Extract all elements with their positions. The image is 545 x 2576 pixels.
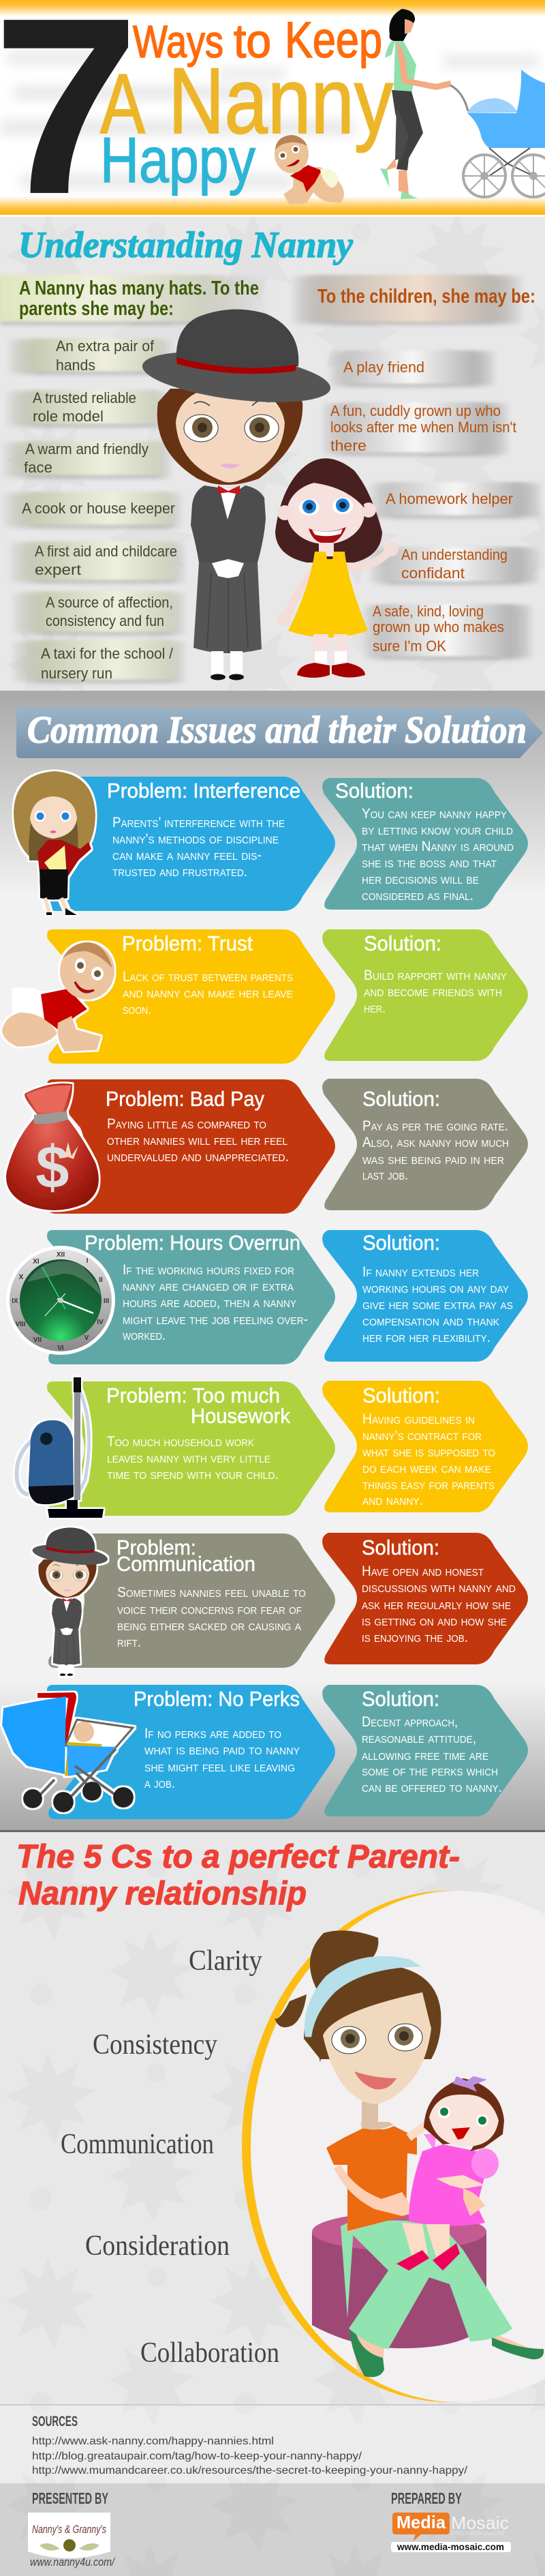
sources: http://www.ask-nanny.com/happy-nannies.html	[32, 2436, 274, 2447]
problem panel: time to spend with your child.	[107, 1467, 279, 1482]
icon: crawling baby	[275, 135, 344, 205]
solution panel: and nanny.	[362, 1493, 423, 1508]
solution panel: Solution:	[362, 1383, 440, 1407]
solution panel: Solution:	[362, 1687, 439, 1711]
row 4: hours overrun	[6, 1230, 528, 1364]
icon: wall clock: II	[99, 1276, 103, 1284]
solution panel	[322, 1079, 528, 1210]
list: parents roles	[0, 338, 187, 682]
problem panel: she might feel like leaving	[144, 1759, 295, 1775]
item: homework: A homework helper	[386, 490, 513, 507]
item: safe: grown up who makes	[373, 618, 504, 635]
item: cuddly	[320, 402, 516, 454]
item: play friend: A play friend	[343, 359, 424, 376]
item: taxi	[10, 640, 187, 682]
problem panel: Problem: Bad Pay	[106, 1087, 264, 1111]
solution panel: working hours on any day	[362, 1280, 509, 1296]
item: warm face	[0, 440, 174, 476]
solution panel: Solution:	[362, 1087, 440, 1111]
solution panel: compensation and thank	[362, 1313, 499, 1329]
title: A Nanny: A	[100, 57, 145, 151]
solution panel	[322, 929, 528, 1061]
item: confidant: An understanding	[401, 546, 508, 563]
solution panel: last job.	[362, 1167, 408, 1183]
solution panel: her for her flexibility.	[362, 1330, 490, 1345]
solution panel: allowing free time are	[362, 1748, 488, 1763]
character: crawling baby	[2, 942, 114, 1051]
footer band	[0, 2483, 545, 2576]
problem panel: can make a nanny feel dis-	[112, 848, 262, 863]
item: affection: consistency and fun	[46, 612, 164, 629]
list: the five Cs: Communication	[61, 2129, 214, 2160]
item: first aid	[7, 541, 187, 580]
solution panel: Decent approach,	[362, 1714, 458, 1730]
problem panel: If the working hours fixed for	[123, 1262, 294, 1278]
illustration: mother and child in circle	[242, 1891, 545, 2402]
row 1: interference	[14, 771, 528, 915]
item: cuddly: there	[330, 437, 367, 454]
item: taxi: nursery run	[41, 665, 112, 682]
solution panel: Solution:	[362, 1536, 439, 1559]
solution panel: she is the boss and that	[362, 855, 497, 871]
sources	[32, 2414, 468, 2476]
list: children roles	[320, 350, 544, 657]
item: extra pair of hands	[5, 338, 172, 374]
problem panel: Parents’ interference with the	[112, 815, 285, 830]
header panel	[0, 0, 545, 247]
row 2: trust	[2, 929, 528, 1064]
solution panel: discussions with nanny and	[362, 1580, 516, 1596]
problem panel: rift.	[117, 1634, 141, 1650]
panel: parents heading	[0, 275, 272, 322]
row 6: communication	[31, 1527, 528, 1676]
character: nanny with hat	[140, 310, 333, 680]
icon: wall clock: III	[104, 1298, 109, 1305]
presented by: www.nanny4u.com/	[30, 2556, 116, 2568]
icon: wall clock: VII	[33, 1336, 42, 1344]
problem panel	[47, 777, 335, 911]
sources: SOURCES	[32, 2414, 78, 2429]
title: A Nanny: Nanny	[168, 49, 393, 153]
solution panel: Solution:	[364, 931, 441, 955]
solution panel: and become friends with	[364, 984, 502, 1000]
icon: wall clock: X	[19, 1274, 24, 1281]
item: role model	[3, 389, 170, 425]
item: extra pair of hands: hands	[56, 357, 95, 374]
section background: understanding nanny	[0, 217, 545, 691]
solution panel: considered as final.	[362, 888, 473, 903]
solution panel	[322, 1381, 528, 1512]
problem panel: Problem: Trust	[122, 931, 253, 955]
problem panel: a job.	[144, 1776, 175, 1791]
icon: wall clock: XII	[57, 1251, 65, 1259]
solution panel	[322, 1533, 528, 1664]
item: role model: role model	[33, 408, 104, 425]
list: the five Cs: Collaboration	[140, 2337, 279, 2369]
item: confidant	[368, 546, 542, 582]
solution panel: Having guidelines in	[362, 1411, 475, 1427]
logo: Media Mosaic: Media	[396, 2512, 446, 2532]
problem panel: Lack of trust between parents	[123, 969, 293, 985]
prepared by: PREPARED BY	[391, 2489, 462, 2507]
solution panel: If nanny extends her	[362, 1264, 479, 1280]
item: homework	[368, 482, 544, 515]
list: the five Cs: Consideration	[85, 2230, 230, 2262]
sources: http://blog.greataupair.com/tag/how-to-keep-your-nanny-happy/	[32, 2451, 362, 2462]
solution panel: can be offered to nanny.	[362, 1780, 502, 1795]
problem panel: Housework	[191, 1404, 290, 1428]
solution panel: is enjoying the job.	[362, 1630, 468, 1645]
icon: woman pushing stroller	[380, 9, 545, 199]
icon: wall clock: VI	[57, 1345, 64, 1352]
title: Ways to Keep	[133, 12, 382, 68]
item: affection: A source of affection,	[46, 594, 173, 611]
icon: baby in stroller	[2, 1692, 134, 1812]
icon: vacuum cleaner	[16, 1377, 104, 1518]
problem panel: hours are added, then a nanny	[123, 1295, 296, 1311]
solution panel: Pay as per the going rate.	[362, 1118, 508, 1134]
item: safe: A safe, kind, loving	[373, 603, 484, 620]
solution panel: Solution:	[335, 779, 414, 803]
solution panel: do each week can make	[362, 1461, 491, 1476]
prepared by	[391, 2489, 511, 2552]
section background: five Cs	[0, 1830, 545, 2576]
icon: wall clock: V	[84, 1334, 89, 1342]
list: the five Cs: Clarity	[189, 1945, 262, 1977]
title: Ways to Keep: Ways	[133, 16, 223, 68]
character: woman with clipboard	[14, 771, 95, 915]
list: the five Cs	[61, 1945, 279, 2369]
solution panel	[322, 778, 528, 910]
icon: wall clock: I	[87, 1257, 89, 1265]
problem panel: Problem: Interference	[107, 779, 300, 803]
solution panel: that when Nanny is around	[362, 839, 514, 854]
title: Ways to Keep: Keep	[285, 12, 382, 68]
icon: money bag: $	[36, 1133, 69, 1201]
solution panel: Build rapport with nanny	[364, 968, 507, 983]
item: safe	[361, 603, 535, 657]
item: confidant: confidant	[401, 565, 465, 582]
solution panel: her decisions will be	[362, 871, 479, 887]
item: taxi: A taxi for the school /	[41, 645, 174, 662]
logo: Media Mosaic: Differentiate yourself	[451, 2530, 505, 2536]
solution panel: what she is supposed to	[362, 1444, 495, 1460]
item: cuddly: A fun, cuddly grown up who	[330, 402, 501, 419]
logo: Nanny's and Granny's: Nanny's & Granny's	[32, 2523, 106, 2536]
item: first aid: A first aid and childcare	[35, 543, 177, 560]
heading: The 5 Cs	[16, 1839, 460, 1912]
problem panel: voice their concerns for fear of	[117, 1602, 302, 1617]
logo: Media Mosaic: www.media-mosaic.com	[396, 2541, 504, 2552]
problem panel	[47, 1381, 335, 1516]
problem panel: and nanny can make her leave	[123, 985, 293, 1001]
problem panel: leaves nanny with very little	[107, 1450, 270, 1466]
item: warm face: A warm and friendly	[25, 440, 149, 458]
solution panel	[322, 1685, 528, 1816]
icon: wall clock: IX	[12, 1298, 18, 1305]
problem panel: Problem: Too much	[106, 1383, 280, 1407]
problem panel: Paying little as compared to	[107, 1116, 266, 1132]
problem panel: Sometimes nannies feel unable to	[117, 1585, 306, 1600]
problem panel: other nannies will feel her feel	[107, 1133, 287, 1148]
item: cook	[0, 492, 184, 525]
problem panel: If no perks are added to	[144, 1726, 281, 1741]
problem panel: being either sacked or causing a	[117, 1618, 301, 1634]
problem panel: Too much household work	[107, 1434, 254, 1450]
section background: common issues	[0, 691, 545, 1831]
heading: Understanding Nanny: Understanding Nanny	[18, 224, 354, 265]
problem panel: nanny are changed or if extra	[123, 1278, 294, 1294]
divider	[0, 2404, 545, 2483]
solution panel	[322, 1230, 528, 1362]
icon: wall clock: XI	[33, 1258, 40, 1265]
icon: wall clock	[6, 1246, 115, 1355]
problem panel	[47, 1533, 335, 1668]
solution panel: by letting know your child	[362, 822, 513, 838]
presented by	[28, 2489, 116, 2568]
item: play friend	[327, 350, 497, 384]
solution panel: Solution:	[362, 1231, 440, 1255]
problem panel: Problem: Hours Overrun	[84, 1231, 300, 1255]
title: Ways to Keep: to	[234, 14, 271, 68]
problem panel: soon.	[123, 1002, 151, 1017]
problem panel: undervalued and unappreciated.	[107, 1149, 289, 1165]
icon: wall clock: IV	[97, 1319, 104, 1326]
heading: The 5 Cs: The 5 Cs to a perfect Parent-	[16, 1839, 460, 1875]
title: Happy: Happy	[100, 124, 255, 196]
solution panel: some of the perks which	[362, 1763, 498, 1779]
mother	[275, 1930, 544, 2377]
icon: wall clock: VIII	[15, 1321, 26, 1328]
solution panel: her.	[364, 1000, 386, 1016]
child	[396, 2076, 504, 2271]
stool	[312, 2213, 486, 2348]
problem panel: might leave the job feeling over-	[123, 1312, 308, 1328]
problem panel: Problem: No Perks	[134, 1687, 300, 1711]
problem panel	[47, 1079, 335, 1214]
solution panel: give her some extra pay as	[362, 1297, 513, 1313]
problem panel: Communication	[116, 1552, 255, 1576]
logo: Media Mosaic: Mosaic	[451, 2513, 509, 2533]
panel: children heading	[290, 275, 535, 322]
solution panel: You can keep nanny happy	[362, 806, 507, 822]
panel: parents heading: parents she may be:	[19, 298, 174, 320]
problem panel: Problem:	[116, 1536, 196, 1559]
item: safe: sure I'm OK	[373, 638, 446, 655]
list: the five Cs: Consistency	[93, 2029, 217, 2061]
item: affection	[10, 591, 187, 632]
solution panel: Also, ask nanny how much	[362, 1135, 509, 1150]
title: A Nanny	[100, 49, 393, 153]
row 3: bad pay	[6, 1079, 528, 1214]
row 5: too much housework	[16, 1377, 528, 1518]
item: cook: A cook or house keeper	[22, 500, 175, 517]
character: girl in yellow dress	[275, 458, 399, 678]
item: extra pair of hands: An extra pair of	[56, 338, 155, 355]
solution panel: was she being paid in her	[362, 1152, 504, 1167]
problem panel	[47, 1685, 335, 1819]
solution panel: reasonable attitude,	[362, 1731, 476, 1746]
item: warm face: face	[24, 459, 52, 476]
row 7: no perks	[2, 1685, 528, 1819]
solution panel: ask her regularly how she	[362, 1597, 511, 1613]
problem panel	[47, 929, 335, 1064]
solution panel: nanny’s contract for	[362, 1428, 482, 1443]
character: nanny miniature	[31, 1527, 109, 1676]
presented by: PRESENTED BY	[32, 2489, 108, 2507]
sources: http://www.mumandcareer.co.uk/resources/the-secret-to-keeping-your-nanny-happy/	[32, 2465, 468, 2476]
solution panel: things easy for parents	[362, 1477, 495, 1493]
heading: The 5 Cs: Nanny relationship	[18, 1876, 307, 1912]
item: role model: A trusted reliable	[33, 389, 136, 406]
panel: parents heading: A Nanny has many hats. To the	[19, 278, 259, 299]
item: first aid: expert	[35, 561, 81, 578]
problem panel: trusted and frustrated.	[112, 864, 247, 880]
solution panel: is getting on and how she	[362, 1613, 507, 1629]
problem panel: what is being paid to nanny	[144, 1742, 300, 1758]
problem panel	[47, 1230, 335, 1364]
problem panel: nanny's methods of discipline	[112, 831, 279, 847]
item: cuddly: looks after me when Mum isn't	[330, 419, 516, 436]
icon: money bag	[6, 1083, 99, 1210]
solution panel: Have open and honest	[362, 1563, 484, 1579]
problem panel: worked.	[123, 1328, 166, 1343]
logo: Media Mosaic	[391, 2512, 511, 2552]
